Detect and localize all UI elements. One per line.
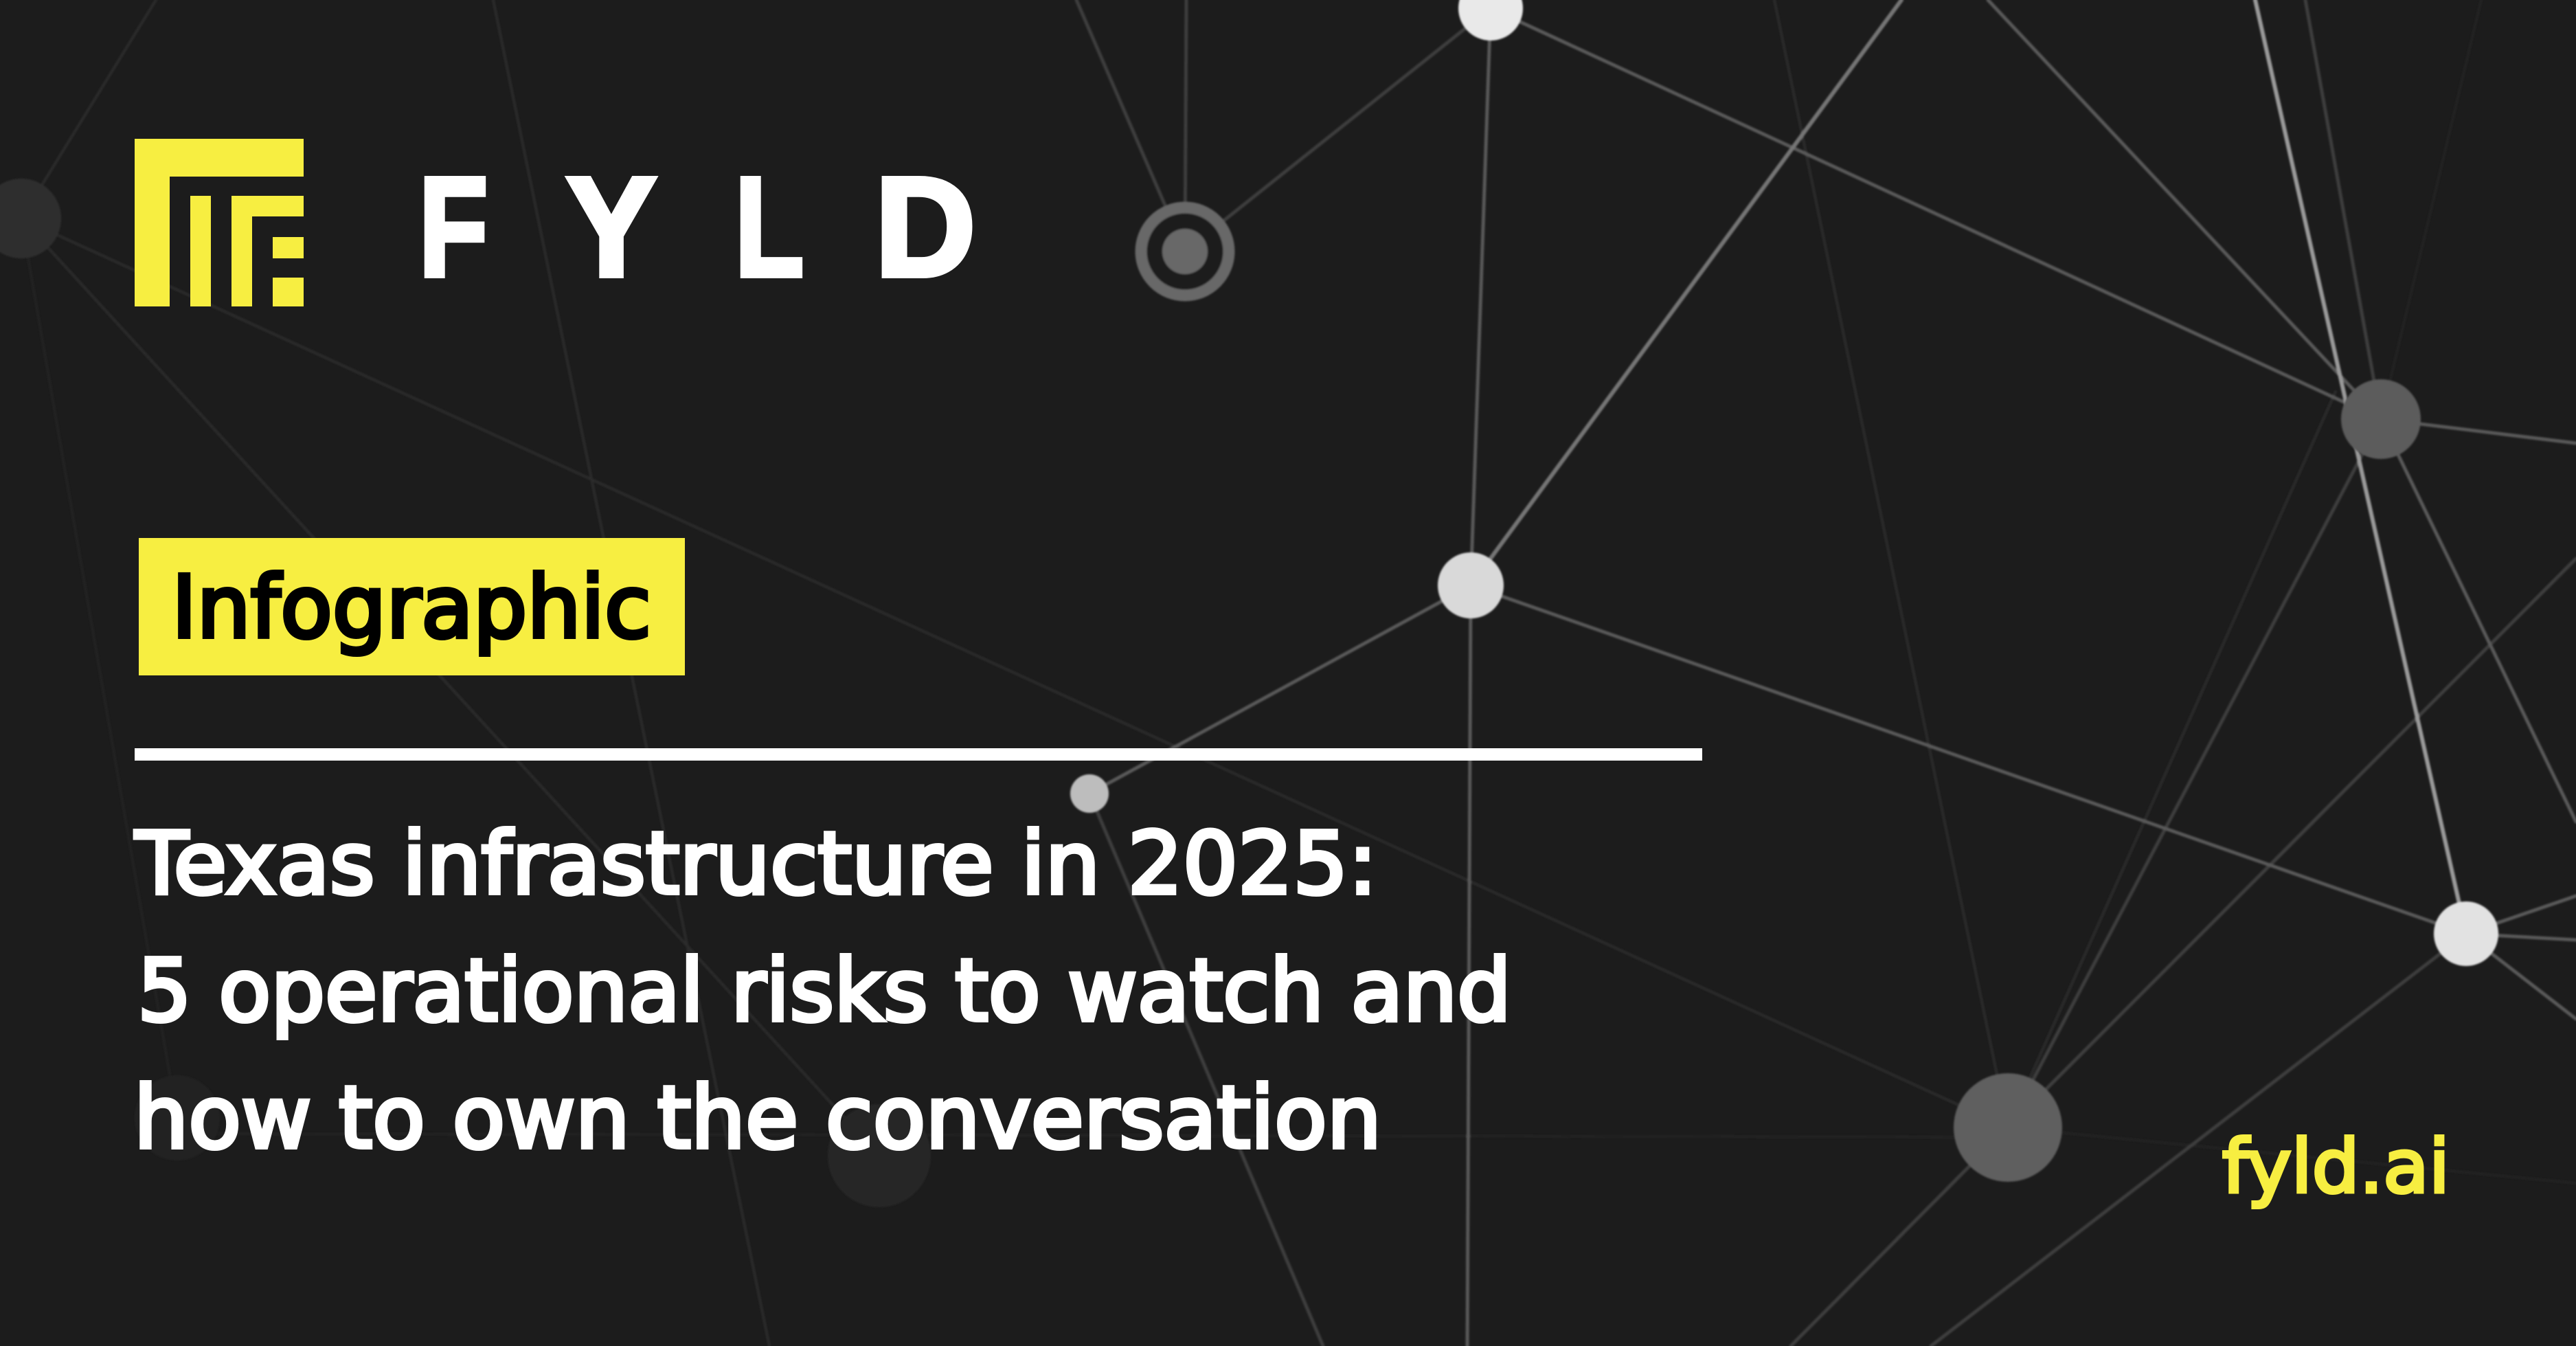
logo mark (135, 139, 304, 306)
title: how to own the conversation (134, 1068, 1381, 1168)
title: Texas infrastructure in 2025: (135, 814, 1377, 914)
node: right light (2434, 901, 2498, 966)
logo wordmark: Y (567, 148, 656, 306)
node: top (1458, 0, 1523, 41)
node: dark far left (0, 179, 61, 258)
logo wordmark: L (735, 148, 804, 306)
logo wordmark: F (419, 148, 488, 306)
divider rule (135, 748, 1702, 761)
badge: Infographic (139, 538, 685, 675)
node: centre (1438, 552, 1504, 618)
node: right grey (2341, 379, 2421, 459)
title (134, 814, 1511, 1168)
website url: fyld.ai (2222, 1125, 2450, 1210)
logo wordmark (419, 148, 975, 306)
node: faint left (135, 1075, 220, 1160)
logo wordmark: D (875, 148, 975, 306)
node: ring target (1141, 207, 1229, 295)
title: 5 operational risks to watch and (137, 941, 1511, 1041)
badge: Infographic: Infographic (172, 558, 651, 658)
node: faint centre (828, 1104, 931, 1207)
node: small (1070, 774, 1109, 813)
node: lower grey (1954, 1073, 2062, 1182)
